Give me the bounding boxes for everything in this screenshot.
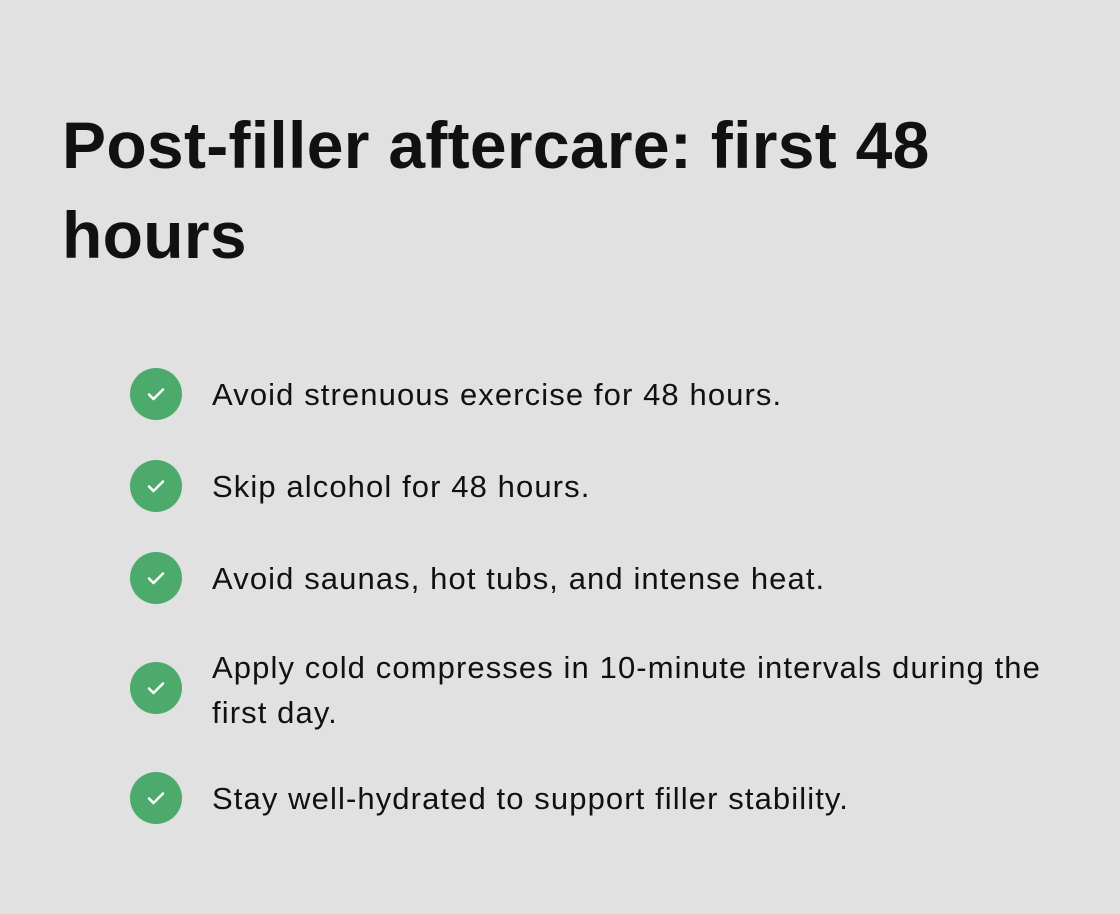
title: Post-filler aftercare: first 48 [62,108,930,182]
icon: check [130,552,182,604]
text [212,650,1041,730]
text: Avoid saunas, hot tubs, and intense heat. [212,561,825,596]
text: Stay well-hydrated to support filler stability. [212,781,849,816]
item 1 [130,368,782,420]
icon: check [130,772,182,824]
item 4 [130,650,1041,730]
text: Apply cold compresses in 10-minute intervals during the [212,650,1041,685]
item 2 [130,460,590,512]
item 3 [130,552,825,604]
title: hours [62,198,247,272]
icon: check [130,368,182,420]
item 5 [130,772,849,824]
text: Avoid strenuous exercise for 48 hours. [212,377,782,412]
text: first day. [212,695,338,730]
title [62,108,930,272]
text: Skip alcohol for 48 hours. [212,469,590,504]
icon: check [130,460,182,512]
icon: check [130,662,182,714]
